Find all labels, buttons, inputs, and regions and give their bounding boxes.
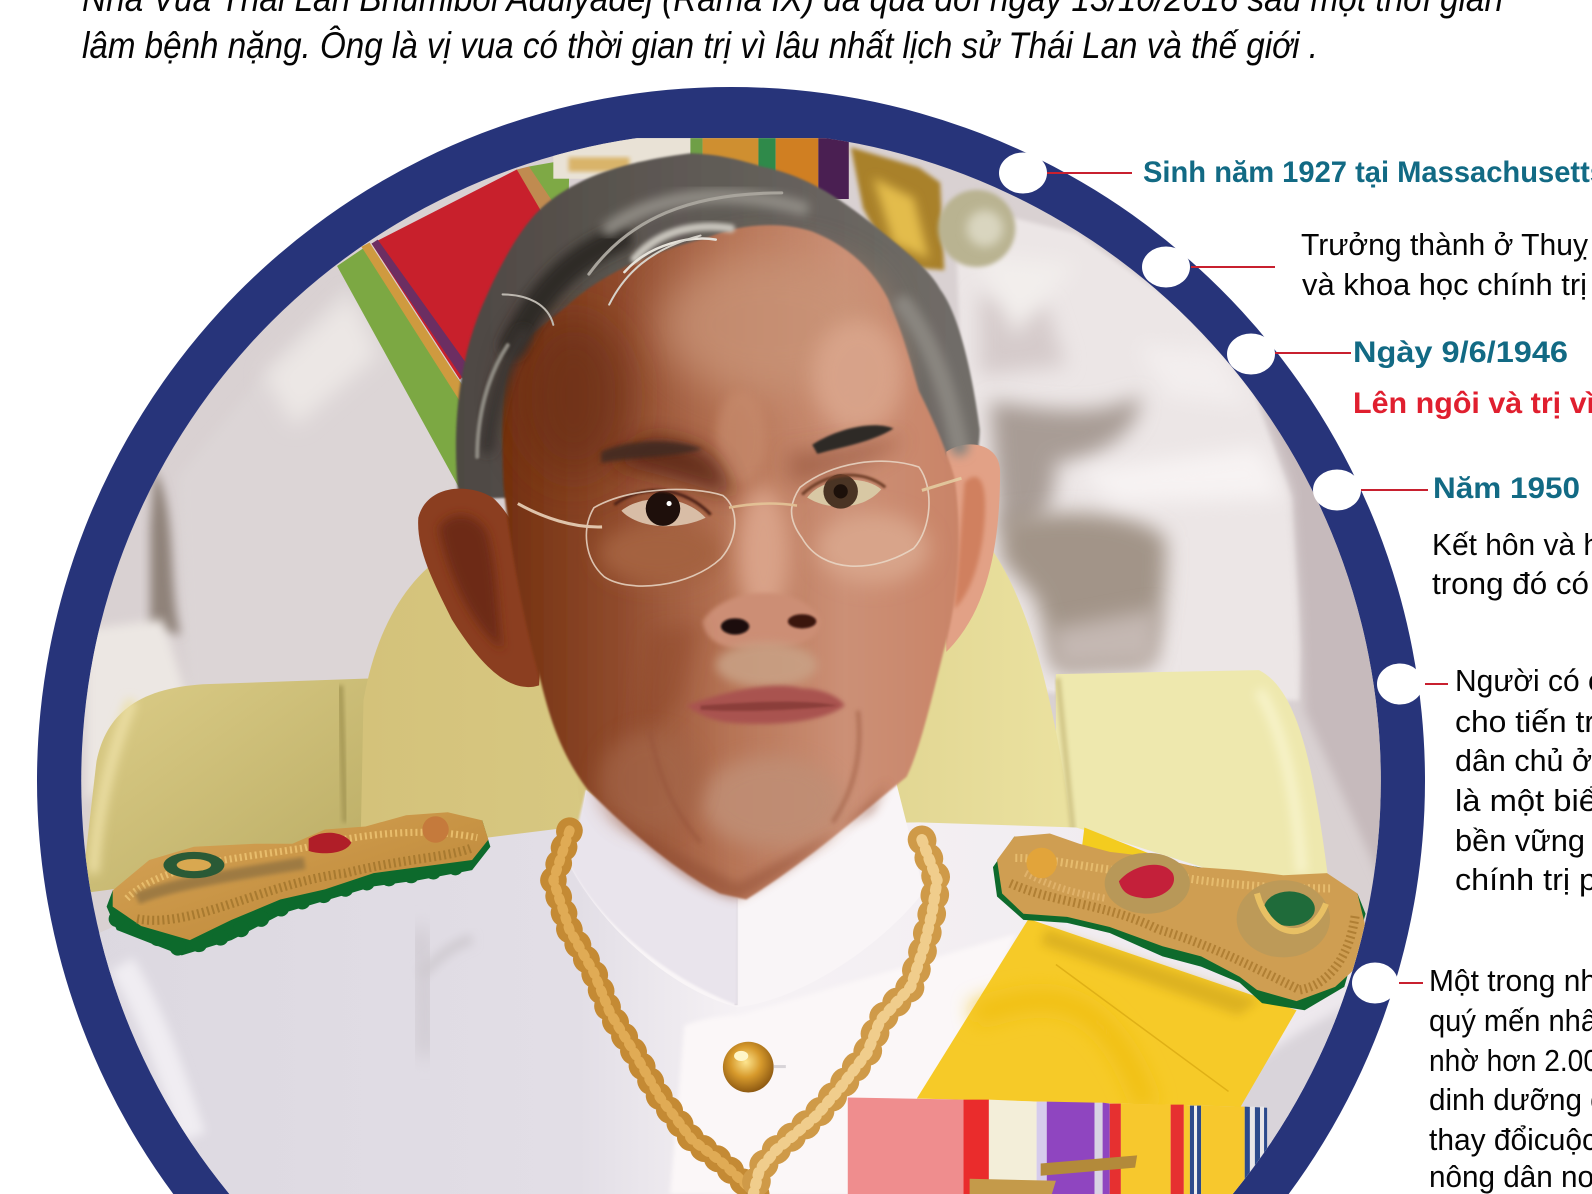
text: democracy [1455, 663, 1592, 897]
text: democracy: bền vững [1455, 823, 1585, 858]
portrait illustration [81, 138, 1381, 1194]
hair [456, 153, 980, 500]
right ear [946, 444, 1000, 652]
sash ribbon [337, 159, 570, 487]
timeline dot 6 [1352, 962, 1398, 1004]
left ear [418, 489, 540, 687]
text: democracy: chính trị p [1455, 862, 1592, 897]
top medals [553, 138, 1015, 270]
timeline dot 5 [1377, 664, 1423, 704]
necklace [553, 831, 937, 1194]
background [81, 138, 1381, 1194]
uniform [61, 822, 1421, 1194]
face [502, 225, 959, 900]
heading: 1946: Ngày 9/6/1946 [1353, 336, 1568, 369]
connector lines [1047, 173, 1448, 983]
hair strands [477, 193, 959, 457]
right epaulet [993, 834, 1366, 1010]
title: intro text [82, 0, 1503, 66]
collar [569, 780, 924, 1007]
left epaulet [107, 812, 490, 955]
nose and mouth [686, 614, 845, 724]
text: democracy: cho tiến tr [1455, 704, 1592, 739]
text: marriage [1432, 527, 1592, 601]
text: democracy: dân chủ ở [1455, 743, 1592, 778]
attendant sleeves [86, 203, 1396, 914]
text: marriage: trong đó có [1432, 566, 1589, 601]
text: education: và khoa học chính trị [1302, 267, 1587, 302]
text: coronation: Lên ngôi và trị vì [1353, 387, 1592, 420]
timeline dot 3 [1227, 334, 1275, 374]
eyes and brows [601, 425, 893, 526]
timeline dot 1 [999, 152, 1047, 194]
medal ribbons [848, 1098, 1267, 1194]
text: education: Trưởng thành ở Thuỵ [1301, 227, 1588, 262]
title: intro text: lâm bệnh nặng. Ông là vị vua có thời gian trị vì lâu nhất lịch sử Thái Lan và thế giới . [82, 25, 1318, 66]
forehead shading [660, 254, 883, 396]
chair [81, 551, 1330, 893]
text: beloved king [1429, 963, 1592, 1194]
button [723, 1042, 786, 1092]
heading: 1950: Năm 1950 [1433, 472, 1580, 505]
glasses [518, 461, 961, 586]
timeline dot 2 [1142, 246, 1190, 288]
text: democracy: là một biể [1455, 783, 1592, 818]
timeline dot 4 [1313, 470, 1361, 510]
text: education [1301, 227, 1588, 302]
sash yellow [917, 827, 1297, 1107]
